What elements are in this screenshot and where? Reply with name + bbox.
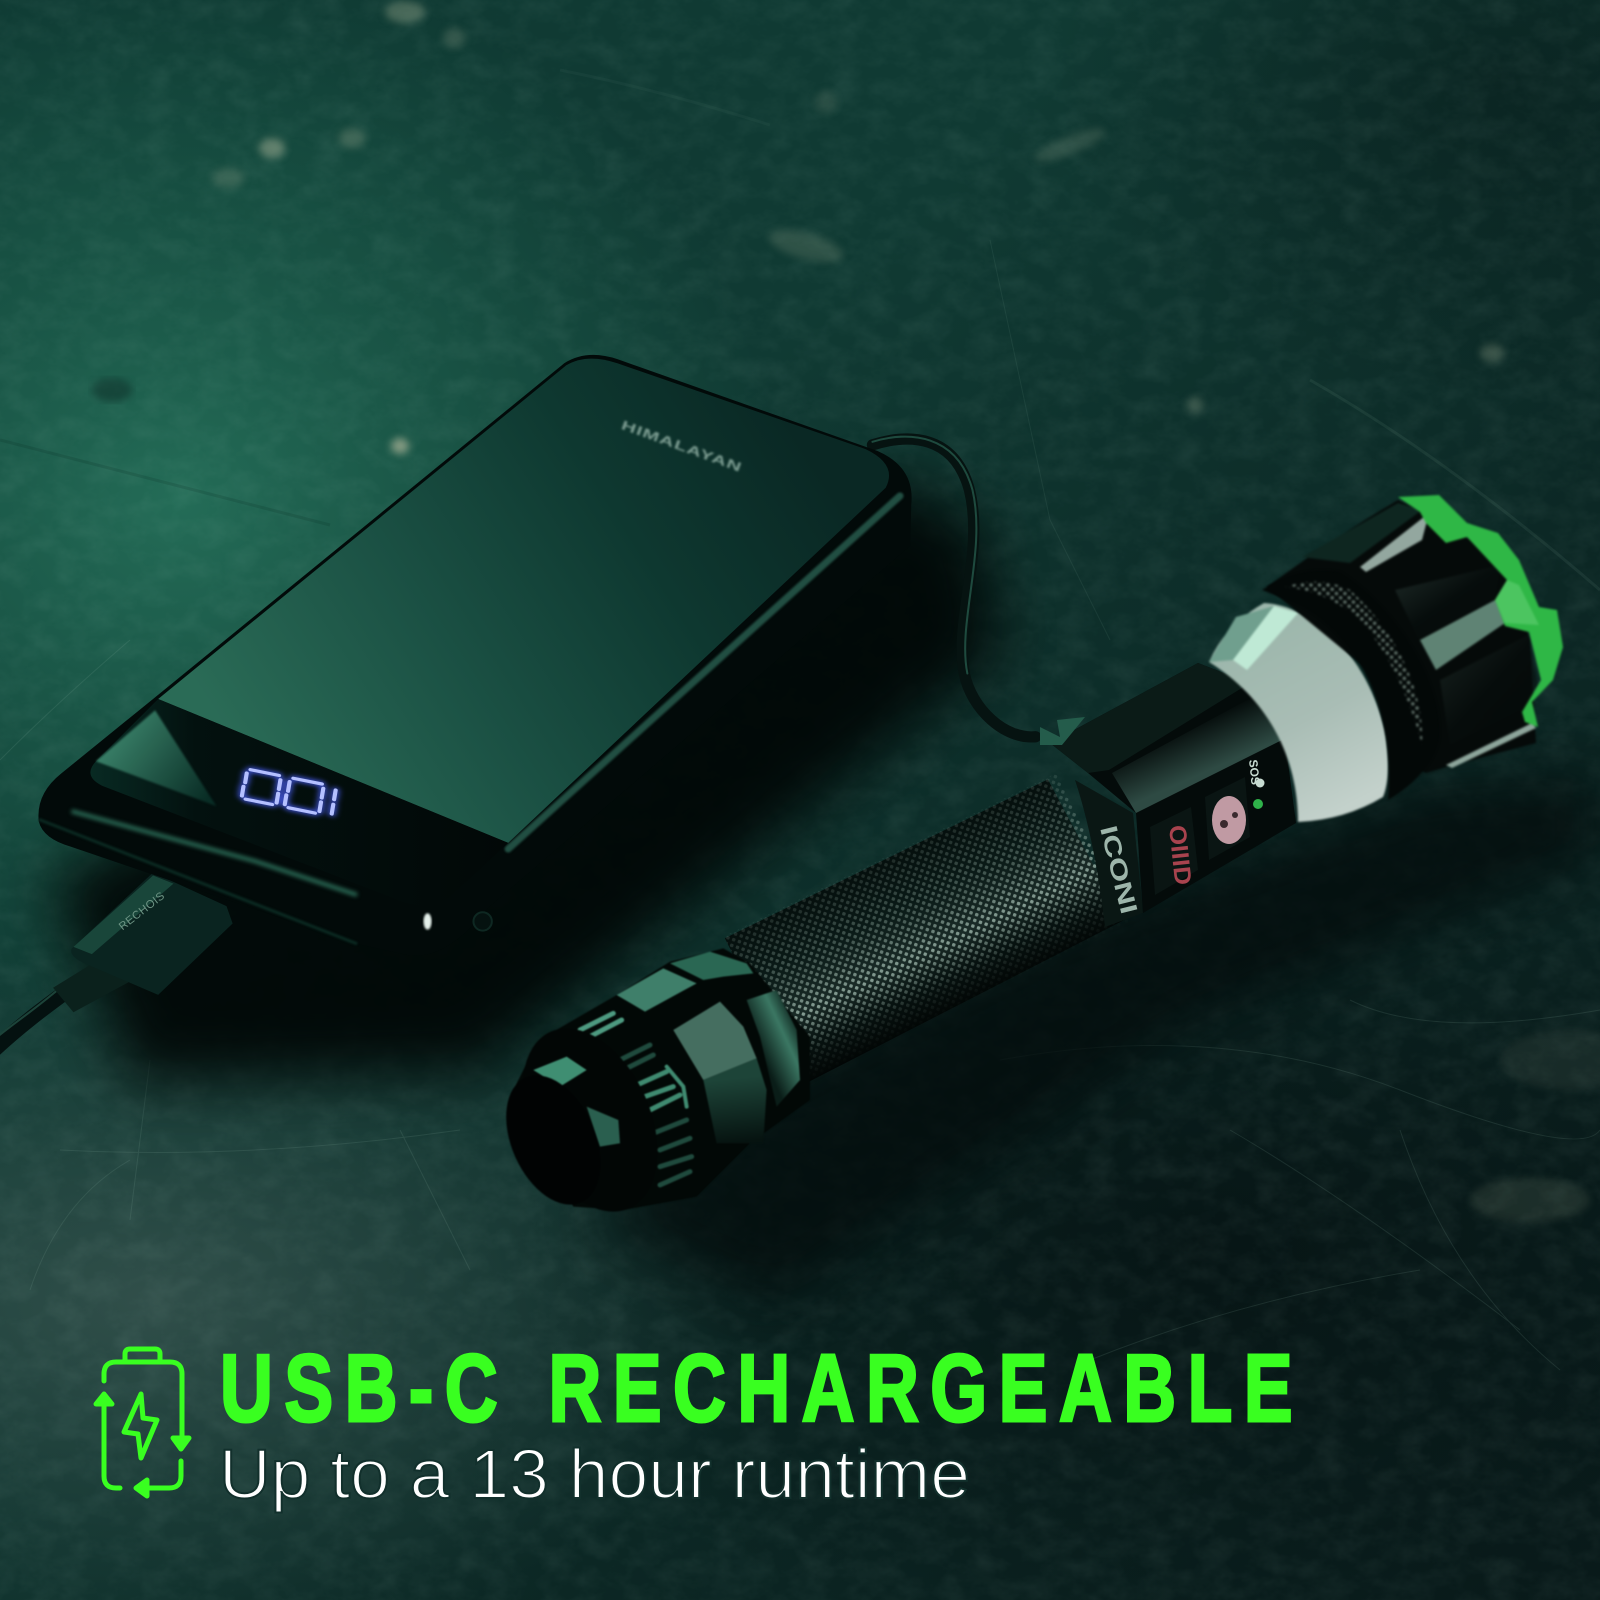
- flashlight shadow: [592, 776, 1600, 1306]
- LED digit display: [241, 769, 336, 816]
- rear flange: [496, 1007, 684, 1233]
- heading: USB-C RECHARGEABLE: [220, 1335, 1304, 1442]
- tail base silhouette: [510, 948, 810, 1210]
- right control window: [1205, 777, 1250, 860]
- ridged collar: [580, 1013, 692, 1185]
- hex nut top facet: [617, 968, 697, 1012]
- collar ring with engraving: ICONI: [1094, 823, 1142, 917]
- glossy display panel: [90, 699, 508, 906]
- side groove highlight: [508, 496, 900, 849]
- power bank shadow: [51, 480, 1000, 1082]
- power bank scene: [0, 355, 1600, 1306]
- tail cap highlights: [533, 1057, 587, 1087]
- green bezel rim: [1398, 495, 1563, 727]
- subheading: Up to a 13 hour runtime: [219, 1435, 970, 1513]
- tail end face: [487, 1061, 619, 1219]
- head shroud: [1267, 495, 1563, 773]
- USB-C cable and plug: [0, 872, 233, 1049]
- neck side face: [1112, 693, 1288, 813]
- collar ring with engraving: [1075, 780, 1143, 927]
- plug brand lettering: RECHOIS: [117, 890, 167, 933]
- hex nut front facet: [673, 1002, 757, 1080]
- power bank body: [38, 355, 912, 956]
- left control window: [1150, 807, 1198, 895]
- flashlight: [487, 495, 1563, 1233]
- panel bottom edge highlight: [71, 811, 357, 895]
- caption block: [96, 1335, 1304, 1513]
- tail assembly: [487, 948, 810, 1233]
- indicator lights: [1246, 759, 1264, 809]
- left control window: OIIID: [1163, 824, 1196, 886]
- cable connector: [1040, 717, 1085, 745]
- matte top face: [158, 359, 889, 843]
- gloss reflection: [96, 710, 216, 806]
- brand lettering: HIMALAYAN: [619, 417, 744, 475]
- icon: battery with charging arrows: [96, 1349, 189, 1496]
- power bank: [38, 355, 912, 956]
- translucent diffuser: [1209, 603, 1388, 822]
- knurled handle: [724, 773, 1130, 1087]
- rear cylinder: [747, 990, 800, 1107]
- head facets: [1360, 513, 1429, 572]
- neck and control panel: [1040, 663, 1296, 913]
- indicator lights: SOS: [1246, 759, 1263, 786]
- knurled bezel ring: [1262, 570, 1440, 800]
- charging cable from power bank to flashlight: [872, 437, 1036, 737]
- neck top block: [1050, 663, 1250, 773]
